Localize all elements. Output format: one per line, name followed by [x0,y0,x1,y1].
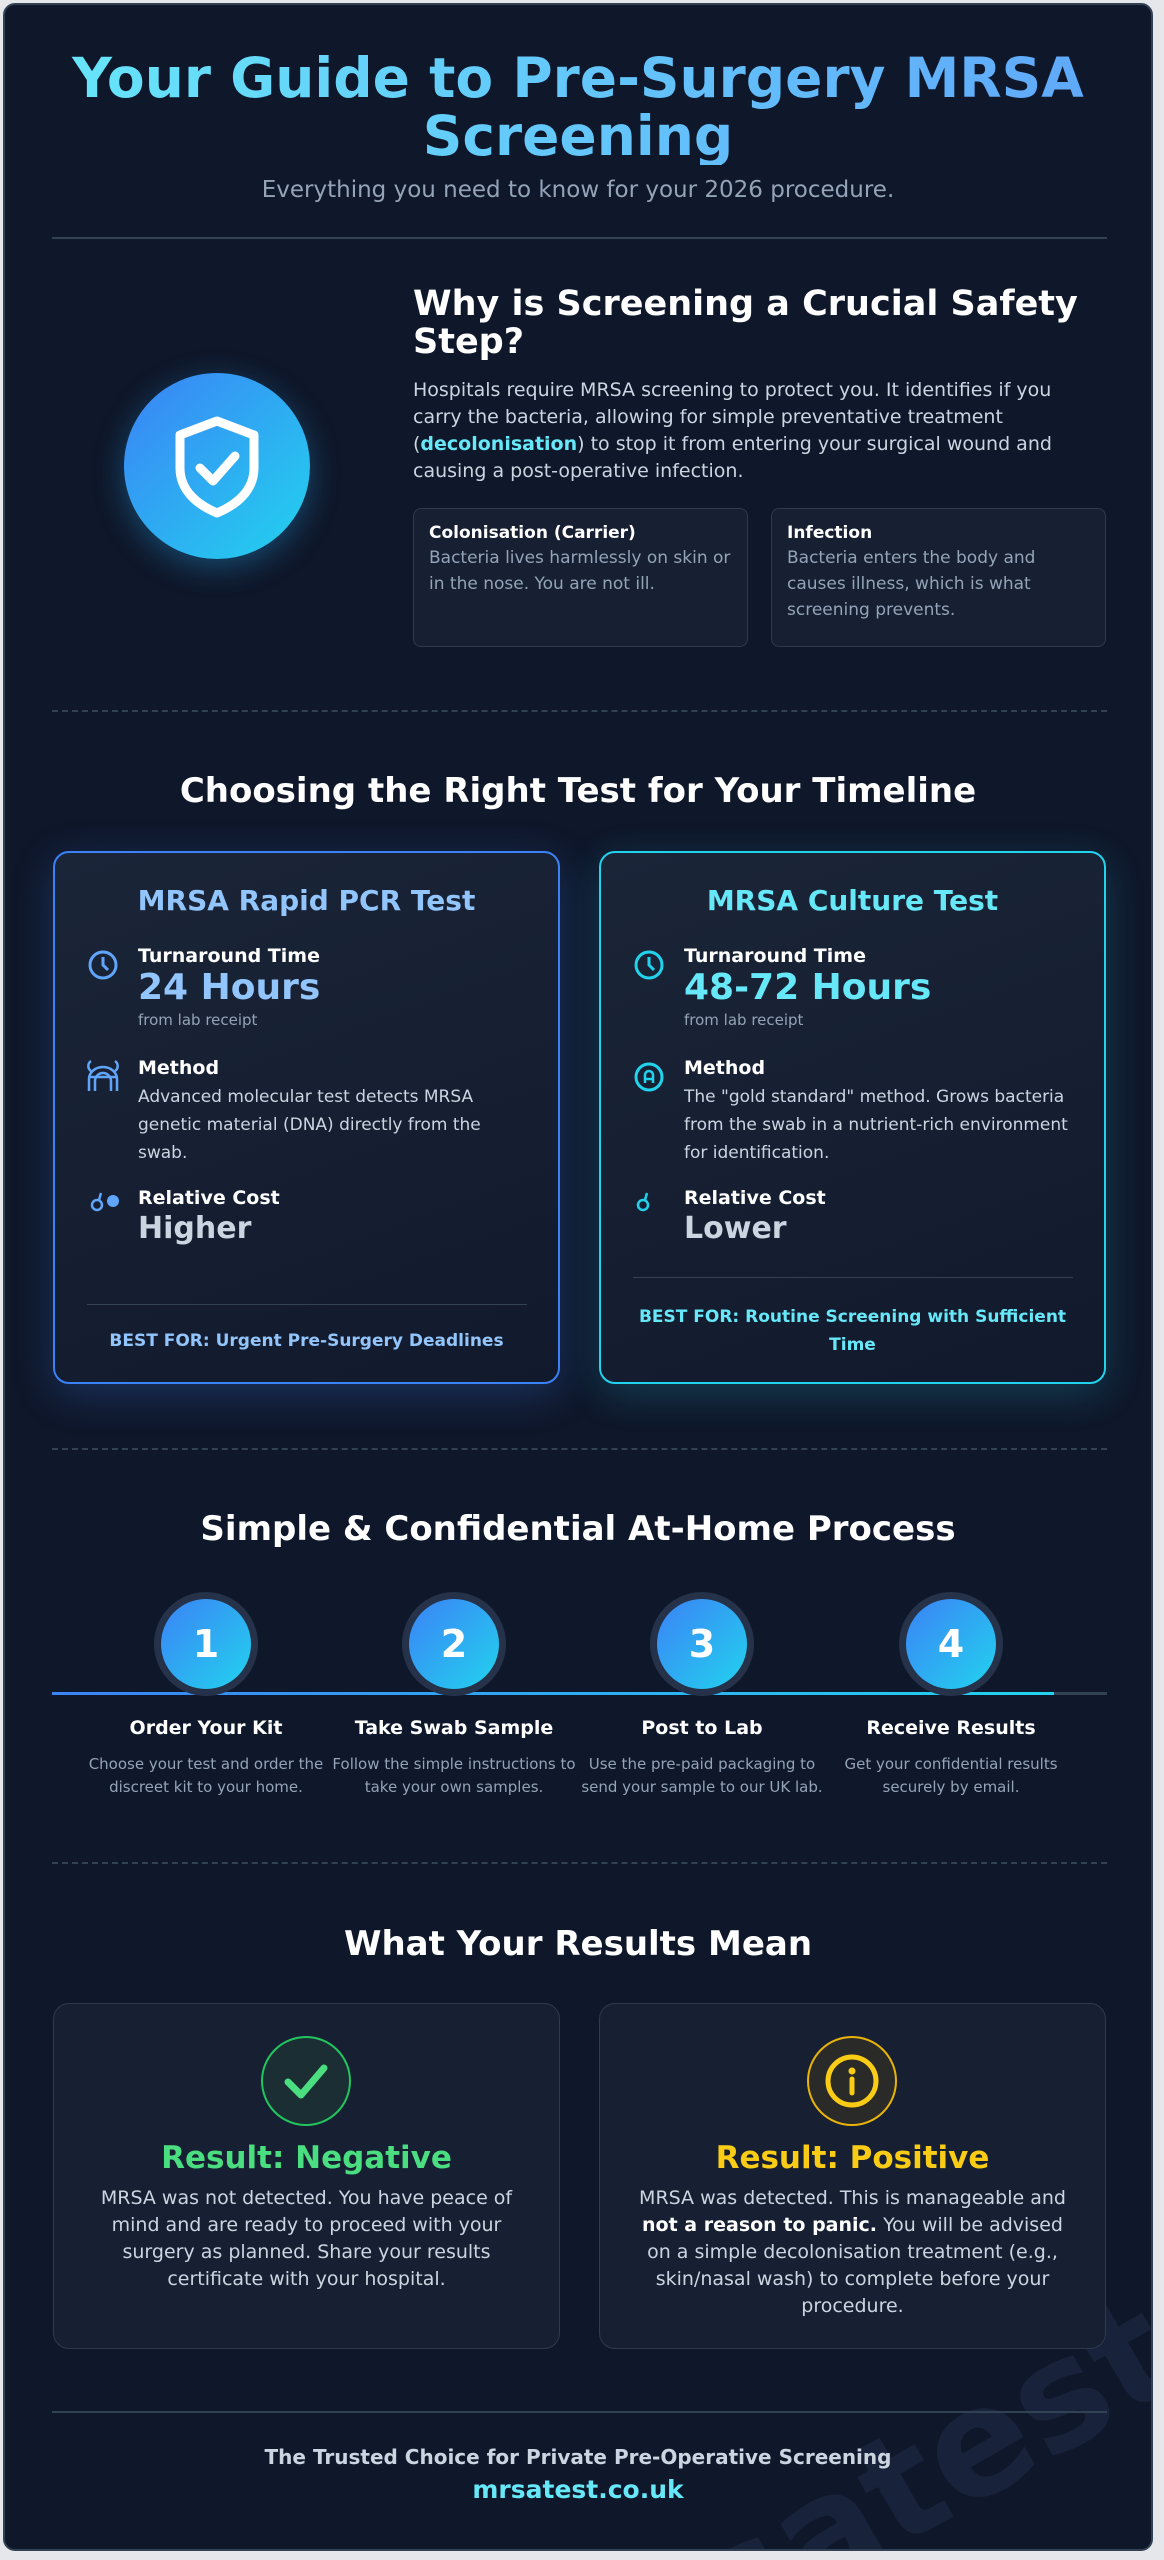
result negative: Result: Negative [161,2140,452,2176]
paragraph: Hospitals require MRSA screening to protect you. It identifies if you carry the bacteria, allowing for simple preventative treatment (decolonisation) to stop it from entering your surgical wound and causing a post-operative infection. [413,379,1052,482]
step 2 [402,1592,506,1696]
title: Screening [423,104,733,168]
step text 3: Use the pre-paid packaging to send your sample to our UK lab. [581,1755,823,1796]
step text 2: Follow the simple instructions to take your own samples. [332,1755,576,1796]
step text 1 [89,1717,323,1796]
box: infection: Bacteria enters the body and causes illness, which is what screening prevents. [787,548,1035,620]
best for: BEST FOR: Urgent Pre-Surgery Deadlines [109,1331,504,1351]
step text 3 [581,1717,823,1796]
icon: check [261,2036,351,2126]
heading: results: What Your Results Mean [344,1924,812,1964]
step text 4: Get your confidential results securely by email. [844,1755,1058,1796]
card: PCR [53,851,560,1384]
step 2: 2 [441,1622,467,1666]
timeline line [52,1692,1107,1695]
box: colonisation: Bacteria lives harmlessly on skin or in the nose. You are not ill. [429,548,730,594]
card: culture: Turnaround Time [684,945,866,967]
card: PCR: 24 Hours [138,967,320,1008]
step 4: 4 [938,1622,964,1666]
step text 3: Post to Lab [641,1717,763,1739]
icon: clock [634,950,664,980]
card: PCR: Method [138,1057,219,1079]
step text 2 [332,1717,576,1796]
card: culture: Relative Cost [684,1187,826,1209]
result negative: MRSA was not detected. You have peace of mind and are ready to proceed with your surgery as planned. Share your results certificate with your hospital. [101,2187,512,2290]
icon: flask [634,1062,664,1092]
best for: BEST FOR: Routine Screening with Sufficient Time [639,1307,1066,1355]
heading: choosing test: Choosing the Right Test for Your Timeline [180,771,976,811]
step 3: 3 [689,1622,715,1666]
result positive [599,2003,1106,2349]
box: colonisation: Colonisation (Carrier) [429,523,636,543]
card: PCR: MRSA Rapid PCR Test [138,884,475,917]
card: PCR: Higher [138,1211,251,1246]
card: culture: The "gold standard" method. Grows bacteria from the swab in a nutrient-rich environment for identification. [684,1087,1068,1163]
step text 1: Order Your Kit [130,1717,282,1739]
card: culture: Method [684,1057,765,1079]
icon: shield [124,373,310,559]
footer tagline: The Trusted Choice for Private Pre-Operative Screening [265,2445,891,2469]
card: PCR: Turnaround Time [138,945,320,967]
title [5,49,1151,165]
step text 4 [844,1717,1058,1796]
step text 1: Choose your test and order the discreet kit to your home. [89,1755,323,1796]
step 3 [650,1592,754,1696]
icon: dna [87,1060,119,1091]
heading: process: Simple & Confidential At-Home Process [200,1509,956,1549]
heading: why screening: Why is Screening a Crucial Safety Step? [413,284,1078,362]
box: colonisation [413,508,748,647]
icon: clock [88,950,118,980]
step 4 [899,1592,1003,1696]
card: culture: MRSA Culture Test [707,884,998,917]
card: PCR: Relative Cost [138,1187,280,1209]
icon: cost [90,1192,119,1212]
card: PCR: from lab receipt [138,1011,257,1029]
footer url: mrsatest.co.uk [472,2475,684,2504]
result negative [53,2003,560,2349]
step 1: 1 [193,1622,219,1666]
result positive: MRSA was detected. This is manageable and not a reason to panic. You will be advised on a simple decolonisation treatment (e.g., skin/nasal wash) to complete before your procedure. [639,2187,1066,2317]
box: infection [771,508,1106,647]
result positive: Result: Positive [716,2140,989,2176]
step 1 [154,1592,258,1696]
subtitle: Everything you need to know for your 2026 procedure. [262,177,894,203]
icon: info [807,2036,897,2126]
card: culture: 48-72 Hours [684,967,931,1008]
card: PCR: Advanced molecular test detects MRSA genetic material (DNA) directly from the swab. [138,1087,481,1163]
step text 4: Receive Results [866,1717,1036,1739]
card: culture: from lab receipt [684,1011,803,1029]
box: infection: Infection [787,523,872,543]
icon: cost [636,1192,650,1212]
card: culture: Lower [684,1211,787,1246]
step text 2: Take Swab Sample [355,1717,553,1739]
title: Your Guide to Pre-Surgery MRSA [72,46,1084,110]
card: culture [599,851,1106,1384]
